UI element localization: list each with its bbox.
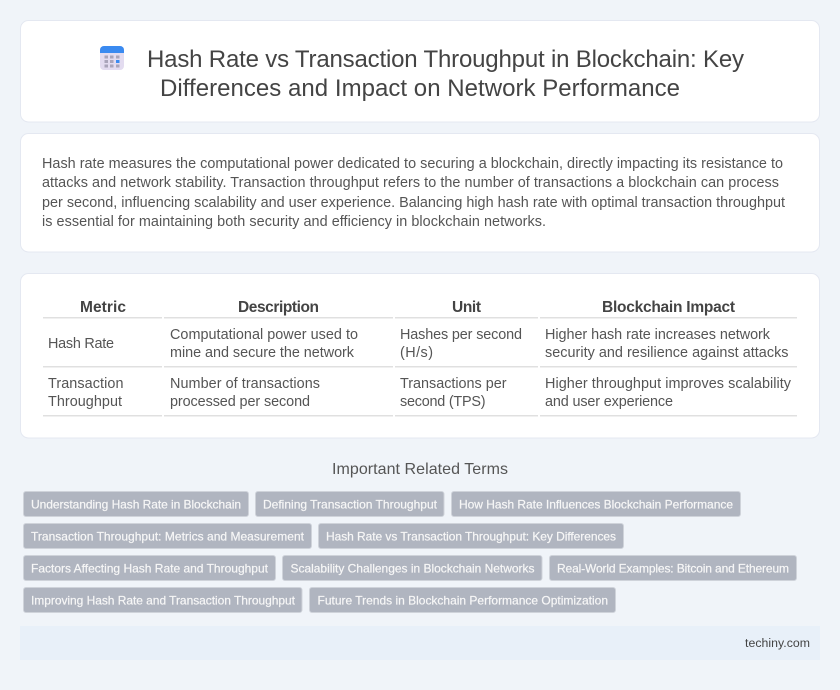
table row: transaction throughput <box>43 376 797 416</box>
tag: understanding hash rate <box>24 492 248 516</box>
text block: summary: Hash rate measures the computational power dedicated to securing a blockchain, directly impacting its resistance to <box>42 156 783 172</box>
text block: summary: attacks and network stability. Transaction throughput refers to the number of transactions a blockchain can process <box>42 175 779 191</box>
table row: hash rate: mine and secure the network <box>170 345 355 361</box>
panel: related term tags <box>24 492 796 612</box>
panel: header <box>20 20 820 122</box>
title <box>147 46 744 102</box>
table header: Metric <box>80 299 126 316</box>
tag: real-world examples: Real-World Examples: Bitcoin and Ethereum <box>557 562 789 576</box>
panel: summary paragraph <box>20 134 820 252</box>
title: Hash Rate vs Transaction Throughput in Blockchain: Key <box>147 46 744 73</box>
table row: transaction throughput: Transactions per <box>400 376 507 392</box>
table header: Unit <box>452 299 481 316</box>
tag: real-world examples <box>550 556 796 580</box>
tag: how hash rate influences performance: How Hash Rate Influences Blockchain Performance <box>459 498 733 512</box>
table row: hash rate: Hash Rate <box>48 336 114 352</box>
panel: comparison table <box>20 274 820 438</box>
table row: hash rate: (H/s) <box>400 345 433 361</box>
table row: transaction throughput: second (TPS) <box>400 394 486 410</box>
table row: hash rate <box>43 327 797 368</box>
tag: factors affecting <box>24 556 276 580</box>
table header: Description <box>238 299 319 316</box>
icon: calendar <box>100 46 124 70</box>
tag: metrics and measurement: Transaction Throughput: Metrics and Measurement <box>31 530 305 544</box>
tag: metrics and measurement <box>24 524 312 548</box>
table header <box>43 299 797 318</box>
heading: important related terms: Important Related Terms <box>332 461 508 478</box>
table row: transaction throughput: Throughput <box>48 394 122 410</box>
table row: transaction throughput: Transaction <box>48 376 124 392</box>
footer <box>20 626 820 660</box>
tag: scalability challenges <box>282 556 542 580</box>
text block: summary: is essential for maintaining both security and efficiency in blockchain networks. <box>42 214 546 230</box>
tag: key differences: Hash Rate vs Transaction Throughput: Key Differences <box>326 530 616 544</box>
tag: defining transaction throughput <box>256 492 444 516</box>
tag: how hash rate influences performance <box>452 492 740 516</box>
tag: future trends: Future Trends in Blockchain Performance Optimization <box>318 594 608 608</box>
tag: improving hash rate <box>24 588 302 612</box>
text block: summary <box>42 156 785 230</box>
tag: key differences <box>318 524 624 548</box>
tag: future trends <box>310 588 616 612</box>
tag: defining transaction throughput: Defining Transaction Throughput <box>263 498 438 512</box>
table row: transaction throughput: Higher throughput improves scalability <box>545 376 792 392</box>
table row: hash rate: security and resilience against attacks <box>545 345 788 361</box>
text block: summary: per second, influencing scalability and user experience. Balancing high hash rate with optimal transaction throughput <box>42 195 785 211</box>
table row: transaction throughput: and user experience <box>545 394 673 410</box>
table row: hash rate: Hashes per second <box>400 327 522 343</box>
tag: understanding hash rate: Understanding Hash Rate in Blockchain <box>31 498 241 512</box>
tag: factors affecting: Factors Affecting Hash Rate and Throughput <box>31 562 269 576</box>
table row: hash rate: Computational power used to <box>170 327 358 343</box>
table row: transaction throughput: Number of transactions <box>170 376 320 392</box>
tag: improving hash rate: Improving Hash Rate and Transaction Throughput <box>31 594 296 608</box>
table row: transaction throughput: processed per second <box>170 394 310 410</box>
footer brand text: techiny.com <box>745 636 810 650</box>
tag: scalability challenges: Scalability Challenges in Blockchain Networks <box>290 562 534 576</box>
table header: Blockchain Impact <box>602 299 735 316</box>
title: Differences and Impact on Network Performance <box>160 75 680 102</box>
table row: hash rate: Higher hash rate increases network <box>545 327 771 343</box>
